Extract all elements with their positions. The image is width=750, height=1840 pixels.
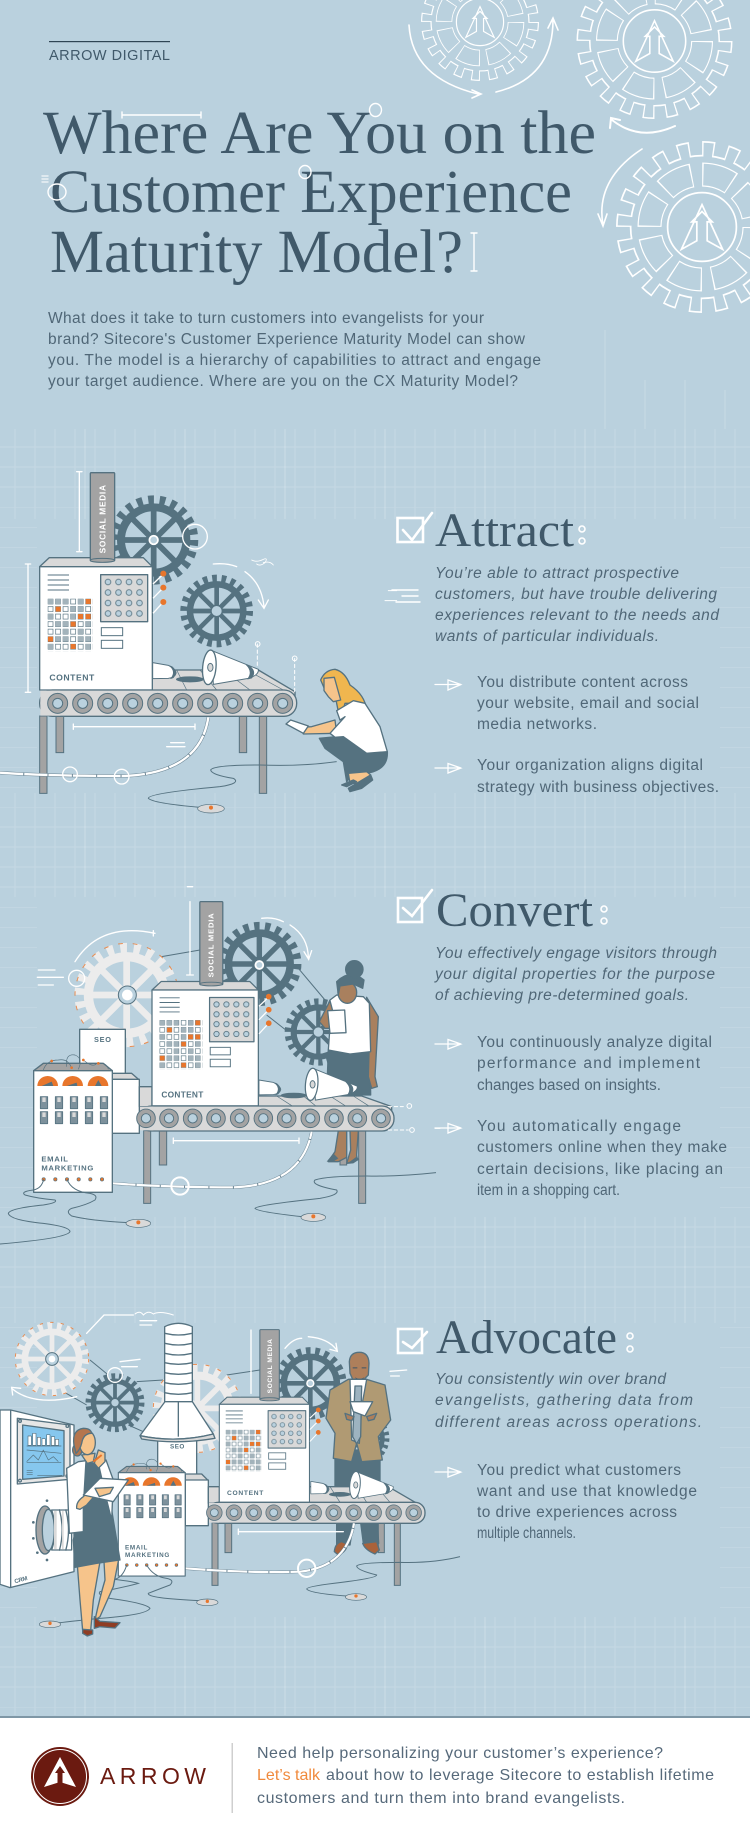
rollers — [207, 1505, 421, 1520]
box behind email machine — [185, 1474, 208, 1526]
social media label: SOCIAL MEDIA — [97, 485, 107, 553]
advocate description: evangelists, gathering data from — [435, 1392, 693, 1409]
light gear left hub — [46, 1353, 58, 1365]
heading text: Convert — [436, 884, 594, 937]
title: Customer Experience — [50, 159, 572, 226]
person lower legs — [337, 1523, 379, 1545]
colon marks — [627, 1333, 633, 1352]
conveyor belt — [208, 1502, 425, 1523]
CRM cabinet — [0, 1410, 74, 1588]
email machine — [34, 1055, 112, 1192]
divider — [232, 1743, 233, 1813]
arrow icon — [435, 1040, 461, 1049]
cable — [185, 1523, 354, 1572]
gear hub — [148, 534, 159, 546]
conveyor legs — [144, 1131, 366, 1203]
gear small — [184, 579, 249, 643]
shoes — [327, 1153, 359, 1164]
eyebrow: Arrow Digital — [49, 41, 170, 64]
rollers — [48, 693, 293, 713]
SEO box — [158, 1437, 197, 1478]
heading text: Attract — [435, 504, 575, 557]
conveyor belt — [40, 690, 297, 716]
logo wordmark: ARROW — [100, 1763, 206, 1789]
convert bullet 1: changes based on insights. — [477, 1077, 661, 1094]
person: woman with clipboard — [67, 1428, 128, 1636]
convert description — [434, 945, 717, 1004]
foot pedals — [39, 1594, 367, 1628]
title: Where Are You on the — [43, 100, 596, 167]
call to action — [257, 1745, 714, 1807]
attract bullet 1: You distribute content across — [477, 674, 688, 691]
dark gear small hub — [314, 1027, 323, 1037]
convert bullet 2: item in a shopping cart. — [477, 1182, 620, 1199]
rollers — [137, 1109, 390, 1128]
illustration: convert machines — [0, 887, 440, 1244]
footer panel — [0, 1716, 750, 1840]
rotation arrows — [409, 18, 675, 226]
title: Maturity Model? — [50, 219, 463, 286]
convert bullet 1: You continuously analyze digital — [477, 1034, 712, 1051]
advocate bullet — [476, 1462, 697, 1542]
email marketing label: EMAIL — [125, 1544, 147, 1551]
advocate bullet: multiple channels. — [477, 1525, 576, 1542]
background blueprint grid — [0, 330, 750, 1715]
megaphone — [311, 1471, 393, 1499]
advocate description: different areas across operations. — [435, 1414, 702, 1431]
arrow icon — [435, 764, 461, 773]
arrow icon — [435, 680, 461, 690]
dark gear hub — [306, 1379, 315, 1388]
checkbox icon — [398, 890, 432, 922]
attract description: experiences relevant to the needs and — [435, 607, 720, 624]
attract bullet 1: media networks. — [477, 716, 597, 733]
attract description: You’re able to attract prospective — [435, 565, 679, 582]
convert bullet 1: performance and implement — [477, 1055, 701, 1072]
light gear left — [19, 1326, 85, 1392]
email marketing label — [125, 1544, 169, 1559]
small dark gear — [89, 1376, 141, 1429]
email marketing label — [41, 1154, 93, 1172]
arrow icon — [435, 1124, 461, 1133]
convert bullet 2: You automatically engage — [477, 1118, 681, 1135]
email marketing label: MARKETING — [41, 1163, 93, 1172]
attract bullet 1 — [477, 674, 699, 733]
person: crouching woman — [286, 669, 387, 792]
email marketing label: EMAIL — [41, 1154, 68, 1163]
blueprint annotations — [37, 887, 440, 1195]
title sketch marks — [42, 104, 477, 271]
funnel — [140, 1323, 215, 1442]
CRM coil — [36, 1506, 72, 1554]
intro paragraph: What does it take to turn customers into evangelists for your — [48, 310, 484, 327]
call to action: customers and turn them into brand evangelists. — [257, 1790, 625, 1807]
SEO box — [80, 1029, 125, 1079]
CRM rivets — [32, 1499, 48, 1561]
attract bullet 2: strategy with business objectives. — [477, 779, 719, 796]
content label: CONTENT — [161, 1089, 203, 1099]
illustration: CRM machine and standing woman — [0, 1410, 128, 1636]
blueprint annotations — [12, 1312, 407, 1577]
cable — [0, 717, 208, 776]
advocate description: You consistently win over brand — [435, 1371, 667, 1388]
gear outline top right — [584, 0, 725, 111]
heading: Attract — [398, 504, 585, 557]
advocate bullet: to drive experiences across — [477, 1504, 677, 1521]
intro paragraph: your target audience. Where are you on the CX Maturity Model? — [48, 373, 518, 390]
foot pedals — [126, 1213, 326, 1227]
email marketing label: MARKETING — [125, 1552, 169, 1559]
content machine — [219, 1330, 321, 1502]
convert bullet 2 — [477, 1118, 727, 1199]
attract description: wants of particular individuals. — [435, 628, 659, 645]
cable — [112, 1132, 312, 1187]
gear outline top left — [427, 0, 533, 75]
megaphone — [153, 649, 258, 685]
dark gear large — [278, 1351, 343, 1416]
wires — [0, 1173, 436, 1244]
dark gear large — [222, 926, 297, 1001]
colon marks — [601, 906, 607, 924]
attract description: customers, but have trouble delivering — [435, 586, 717, 603]
conveyor legs — [40, 716, 267, 793]
advocate bullet: You predict what customers — [477, 1462, 681, 1479]
wire and foot pedal — [148, 762, 337, 813]
light gear — [80, 948, 173, 1041]
title — [43, 100, 596, 286]
footer top border — [0, 1716, 750, 1718]
belt top — [139, 1087, 392, 1113]
call to action: Need help personalizing your customer’s experience? — [257, 1745, 663, 1762]
convert bullet 1 — [477, 1034, 712, 1094]
convert description: your digital properties for the purpose — [434, 966, 715, 983]
conveyor legs — [212, 1523, 400, 1585]
attract bullet 2 — [477, 757, 719, 796]
sketch lines — [392, 590, 420, 602]
email machine — [118, 1459, 185, 1576]
call to action: Let’s talk — [257, 1767, 321, 1784]
light gear orange edges — [153, 1364, 241, 1452]
heading text: Advocate — [436, 1311, 617, 1364]
person shoes — [334, 1542, 379, 1555]
convert bullet 2: certain decisions, like placing an — [477, 1161, 723, 1178]
checkbox icon — [398, 513, 432, 542]
dark gear partial behind person — [340, 1415, 387, 1462]
convert bullet 2: customers online when they make — [477, 1139, 727, 1156]
intro paragraph: you. The model is a hierarchy of capabilities to attract and engage — [48, 352, 541, 369]
convert description: You effectively engage visitors through — [435, 945, 717, 962]
connector lines — [162, 950, 325, 1029]
call to action: about how to leverage Sitecore to establish lifetime — [326, 1767, 714, 1784]
belt top — [152, 670, 295, 703]
attract bullet 1: your website, email and social — [477, 695, 699, 712]
person pants upper — [335, 1450, 380, 1503]
convert description: of achieving pre-determined goals. — [435, 987, 689, 1004]
left square end of belt — [40, 691, 60, 716]
light gear left orange edges — [15, 1322, 89, 1396]
box behind email machine — [112, 1073, 139, 1133]
content machine — [152, 902, 272, 1106]
light gear orange edges — [75, 943, 178, 1047]
heading: Advocate — [398, 1311, 633, 1364]
megaphone — [259, 1068, 357, 1101]
gear small hub — [212, 606, 222, 616]
eyebrow: Arrow Digital: ARROW DIGITAL — [49, 48, 170, 64]
checkbox icon — [398, 1329, 427, 1353]
footer — [0, 1716, 750, 1840]
dark gear small — [288, 1002, 348, 1062]
gear large — [114, 500, 193, 580]
light gear behind funnel — [158, 1369, 237, 1448]
attract bullet 2: Your organization aligns digital — [477, 757, 703, 774]
person: man in blazer — [326, 1352, 391, 1462]
gear outline right — [625, 150, 750, 304]
person legs — [328, 1131, 358, 1163]
advocate description — [435, 1371, 702, 1431]
arrow icon — [435, 1468, 461, 1477]
content machine — [40, 473, 166, 690]
colon marks — [579, 526, 585, 544]
person: standing woman — [319, 961, 378, 1095]
social media label: SOCIAL MEDIA — [267, 1339, 274, 1393]
advocate bullet: want and use that knowledge — [476, 1483, 697, 1500]
illustration: attract machine — [0, 472, 397, 813]
CRM label: CRM — [14, 1576, 28, 1585]
conveyor belt — [139, 1106, 394, 1131]
belt top — [208, 1487, 423, 1513]
decorative header gears — [409, 0, 750, 304]
connector lines — [63, 1360, 260, 1432]
illustration: advocate machines — [12, 1312, 460, 1628]
wires — [55, 1557, 460, 1623]
content label: CONTENT — [49, 673, 95, 683]
SEO box: SEO — [170, 1443, 184, 1450]
heading: Convert — [398, 884, 607, 937]
content label: CONTENT — [227, 1490, 263, 1497]
blueprint annotations — [25, 472, 397, 784]
social media label: SOCIAL MEDIA — [207, 913, 216, 977]
intro paragraph — [48, 310, 541, 390]
attract description — [435, 565, 720, 645]
dark gear hub — [254, 960, 265, 970]
small dark gear hub — [111, 1399, 119, 1406]
logo emblem — [31, 1747, 89, 1806]
intro paragraph: brand? Sitecore's Customer Experience Maturity Model can show — [48, 331, 526, 348]
SEO box: SEO — [94, 1035, 111, 1044]
light gear hub — [118, 986, 136, 1004]
